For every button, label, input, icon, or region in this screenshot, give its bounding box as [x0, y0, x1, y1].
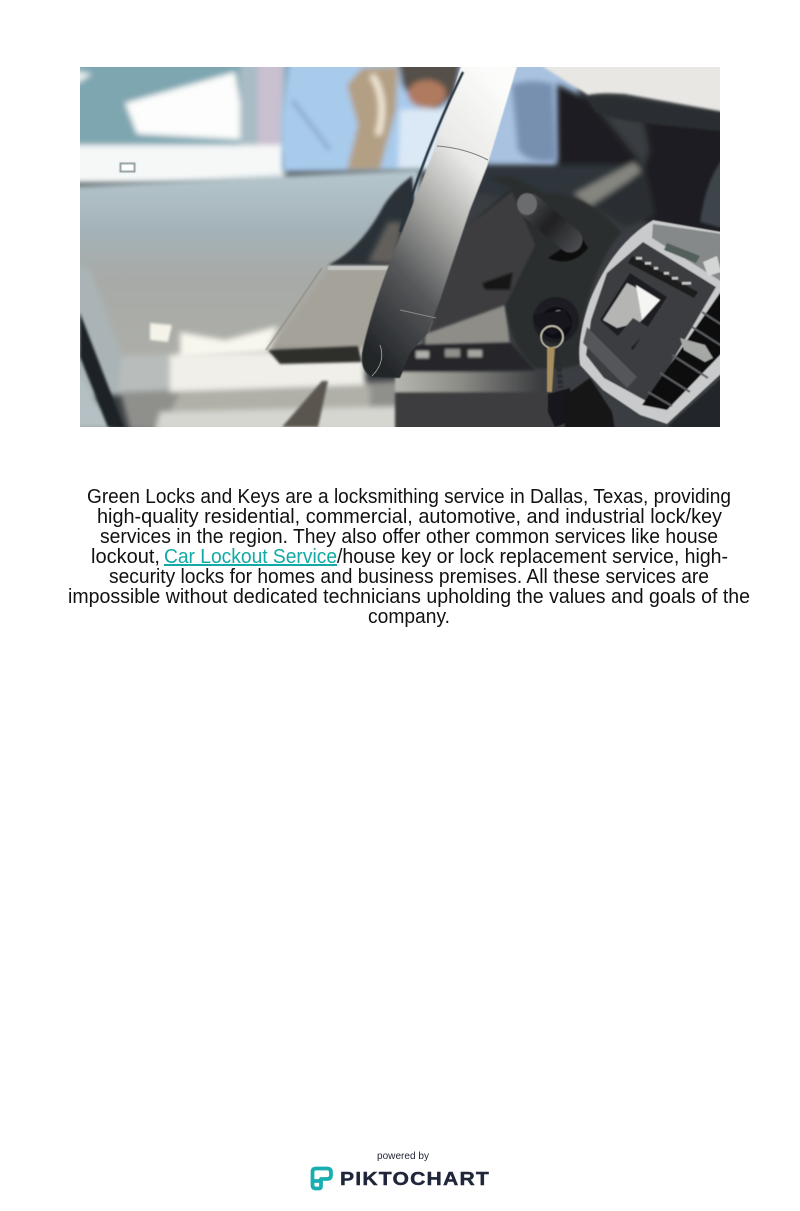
windscreen pillar and dashboard top	[470, 84, 730, 240]
body paragraph: security locks for homes and business premises. All these services are	[109, 566, 709, 588]
photo: car interior with keys in the ignition	[70, 57, 730, 432]
wiper stalk	[517, 193, 588, 261]
shadow on the sill	[282, 381, 328, 427]
body paragraph: company.	[368, 606, 450, 628]
wheel stitching	[437, 146, 488, 160]
icon: Piktochart logo mark	[312, 1168, 331, 1188]
body paragraph: services in the region. They also offer other common services like house	[100, 526, 718, 548]
body paragraph: Green Locks and Keys are a locksmithing service in Dallas, Texas, providing	[87, 486, 731, 508]
lower door and window switches	[393, 304, 534, 427]
body paragraph: /house key or lock replacement service, high-	[337, 546, 728, 568]
steering column	[428, 176, 622, 369]
body paragraph: lockout,	[91, 546, 160, 568]
link: Car Lockout Service: Car Lockout Service	[164, 546, 337, 568]
dashboard hood	[591, 96, 720, 131]
Piktochart wordmark: PIKTOCHART	[340, 1169, 490, 1189]
side mirror	[512, 81, 557, 161]
door sunlight	[180, 326, 278, 358]
center console	[565, 220, 722, 430]
body paragraph: high-quality residential, commercial, automotive, and industrial lock/key	[97, 506, 722, 528]
instrument cluster edge	[700, 160, 722, 228]
outside window icon	[120, 164, 134, 172]
console knob	[600, 273, 667, 350]
air vents	[642, 290, 722, 410]
door grab pocket	[268, 346, 362, 364]
body paragraph	[68, 486, 750, 628]
footer: powered by Piktochart	[312, 1151, 490, 1189]
console top panel	[652, 224, 722, 282]
ignition with keys	[533, 297, 579, 427]
steering wheel rim	[362, 60, 519, 378]
console buttons	[628, 256, 698, 298]
man in blue shirt outside	[281, 60, 580, 172]
door panel	[70, 169, 420, 432]
window and outside view	[70, 57, 290, 183]
dark gap beside door panel	[80, 313, 124, 427]
body paragraph: impossible without dedicated technicians upholding the values and goals of the	[68, 586, 750, 608]
door handle recess	[328, 176, 420, 265]
light patch on door	[150, 323, 172, 342]
dark window edge of wheel	[400, 72, 463, 232]
powered by label: powered by	[377, 1151, 429, 1162]
